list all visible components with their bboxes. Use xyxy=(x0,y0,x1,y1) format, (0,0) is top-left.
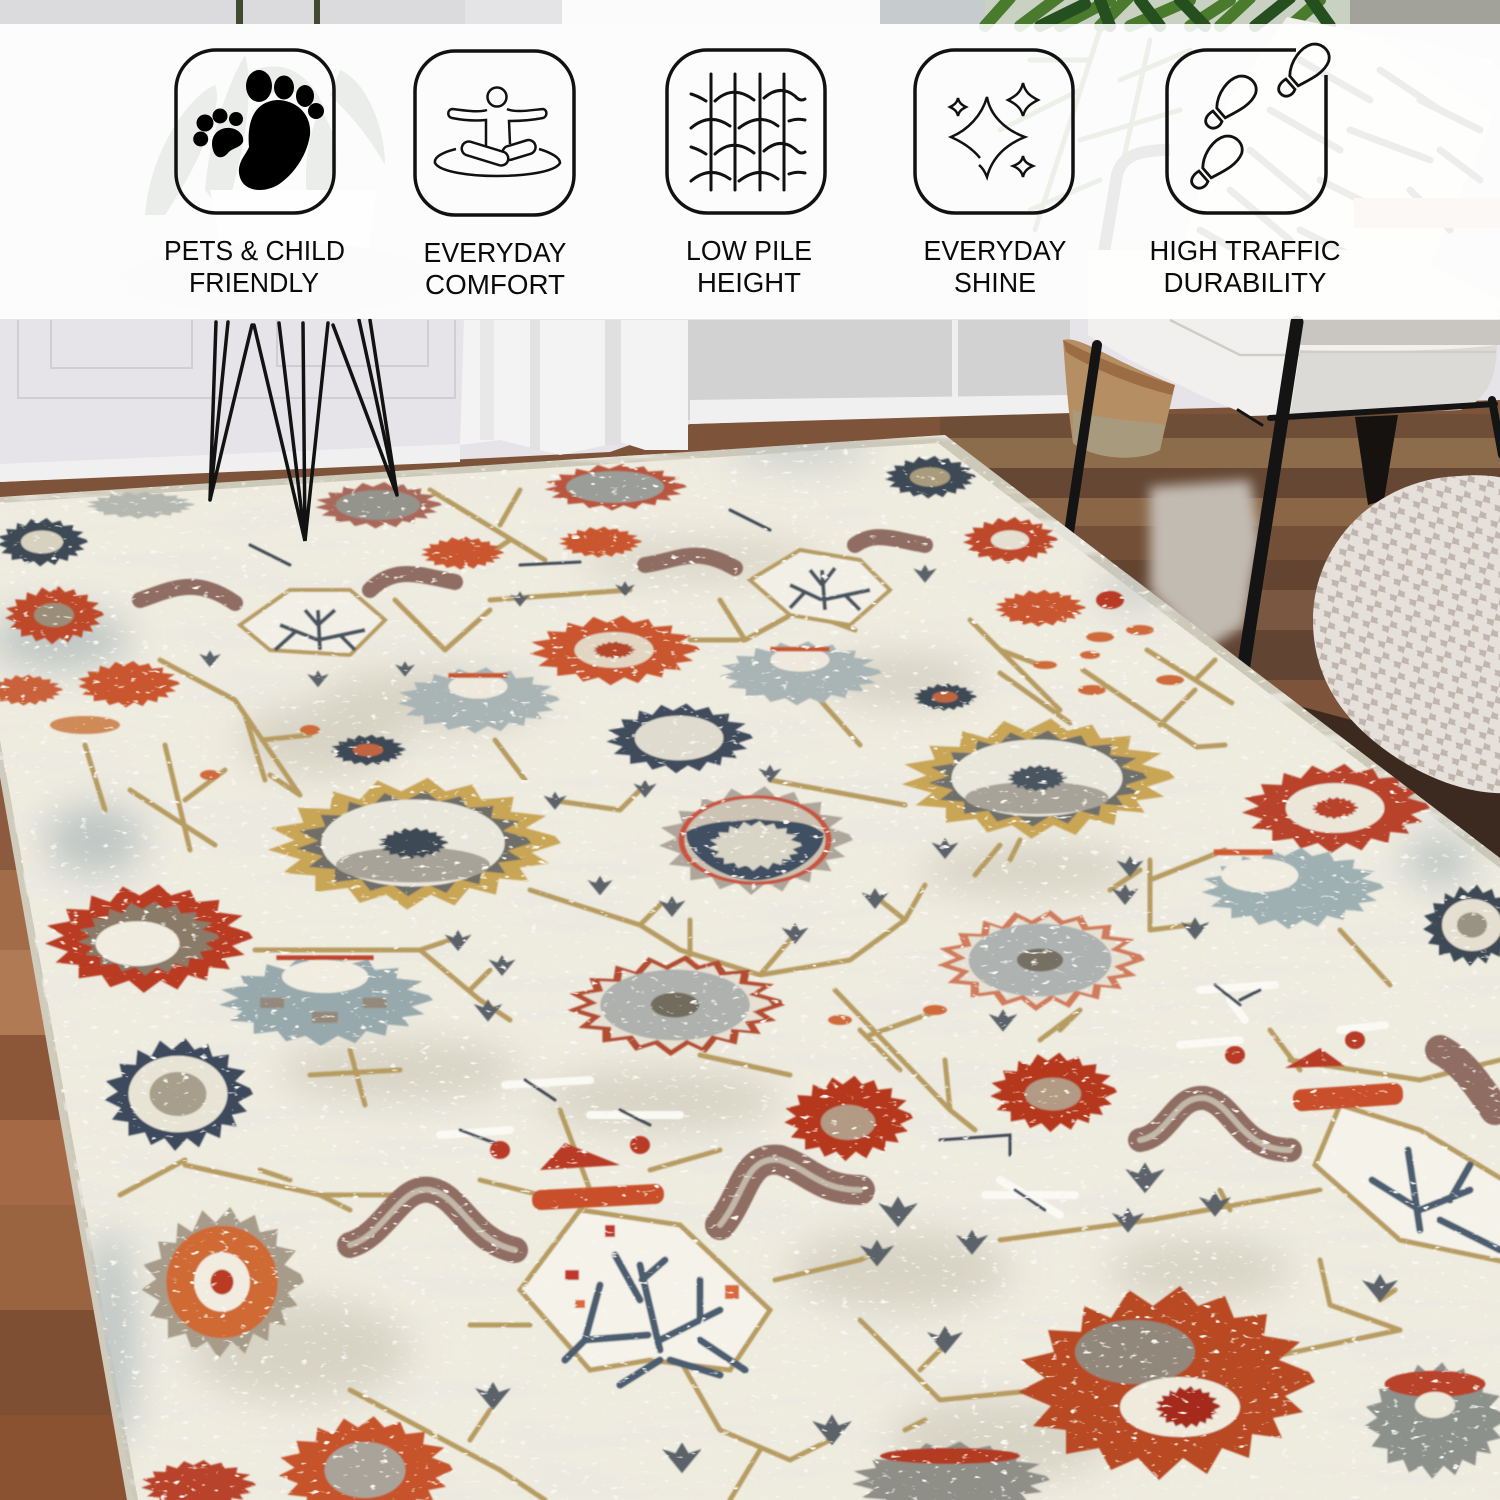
chair back frame behind banner xyxy=(1101,38,1500,270)
plant and side table behind banner xyxy=(125,55,433,316)
label: everyday comfort xyxy=(424,237,567,300)
rug mottled shading xyxy=(190,542,1290,1480)
label: low pile height xyxy=(686,235,812,298)
medallion: navy small right xyxy=(914,684,977,711)
bamboo foliage top right xyxy=(985,0,1330,230)
medallion: rust left xyxy=(45,884,253,993)
medallion: orange left edge xyxy=(0,675,63,706)
medallion: orange upper xyxy=(530,615,700,685)
rug streak texture xyxy=(0,430,1500,1500)
medallion: blue grey upper left xyxy=(398,667,560,733)
medallion: gold left xyxy=(268,778,561,910)
medallion: navy centre xyxy=(659,786,853,895)
rug border wear xyxy=(0,438,1475,1450)
label: high traffic durability xyxy=(1150,235,1340,298)
plant stems above banner xyxy=(236,0,320,24)
medallion: orange left small xyxy=(77,661,180,708)
label: high traffic durability: HIGH TRAFFIC xyxy=(1150,235,1340,266)
wavy brown leaves xyxy=(140,537,1495,1250)
medallion: grey red bottom xyxy=(852,1442,1050,1500)
label: pets and child xyxy=(164,235,345,298)
label: low pile height: LOW PILE xyxy=(686,235,812,266)
medallion: navy far right xyxy=(1423,885,1500,966)
medallion: rust far left xyxy=(5,586,104,644)
leaf tips xyxy=(199,565,1398,1473)
medallion: rust right xyxy=(1242,764,1430,853)
label: high traffic durability: DURABILITY xyxy=(1164,267,1327,298)
medallion: shield left bottom xyxy=(142,1207,304,1358)
rug edge binding xyxy=(0,760,130,1500)
label: pets and child: PETS & CHILD xyxy=(164,235,345,266)
small hex panel with tree, left xyxy=(240,590,385,655)
armchair seat xyxy=(1088,250,1500,416)
feature banner xyxy=(0,24,1500,319)
icon: pets and child xyxy=(176,50,334,213)
room background wall xyxy=(0,0,1500,500)
large hex panel with tree, centre bottom xyxy=(520,1210,770,1385)
stool legs xyxy=(210,320,397,541)
medallion: rust grey centre xyxy=(567,955,785,1056)
label: everyday shine xyxy=(924,235,1067,298)
medallion: salmon grey right xyxy=(937,910,1145,1011)
chair legs xyxy=(1064,322,1500,703)
medallion: navy top left xyxy=(0,518,88,566)
label: low pile height: HEIGHT xyxy=(697,267,801,298)
orange bars xyxy=(532,1082,1404,1210)
icon: everyday shine xyxy=(915,50,1073,213)
icon: low pile height xyxy=(667,50,825,213)
medallion: white left sprig xyxy=(86,492,195,519)
wood floor xyxy=(0,400,1500,1500)
medallion: blue grey upper right xyxy=(720,641,882,705)
label: everyday comfort: EVERYDAY xyxy=(424,237,567,268)
medallion: red lower xyxy=(784,1076,913,1161)
label: pets and child: FRIENDLY xyxy=(189,267,319,298)
medallion: orange bottom xyxy=(279,1416,453,1500)
label: everyday shine: EVERYDAY xyxy=(924,235,1067,266)
medallion: rust top right xyxy=(963,517,1058,564)
red buds xyxy=(490,591,1365,1170)
medallion: navy lower left xyxy=(104,1038,253,1151)
medallion: grey rust top centre xyxy=(544,464,687,511)
terracotta plant pot xyxy=(1063,339,1175,458)
medallion: red lower right xyxy=(990,1053,1117,1132)
small hex panel with tree, right xyxy=(750,550,890,625)
medallion: navy upper xyxy=(606,703,753,773)
label: everyday shine: SHINE xyxy=(954,267,1036,298)
medallion: grey red far right xyxy=(1364,1362,1500,1479)
orange flower clusters xyxy=(50,625,1184,1025)
medallion: large rust bottom right xyxy=(1018,1286,1315,1480)
medallion: blue grey left xyxy=(219,955,433,1046)
medallion: navy top right xyxy=(885,456,976,499)
label: everyday comfort: COMFORT xyxy=(425,269,565,300)
medallion: orange top small xyxy=(421,537,504,570)
baseboard xyxy=(0,395,1070,482)
navy sprig accents xyxy=(250,510,1260,1210)
rug xyxy=(0,430,1500,1500)
icon: everyday comfort xyxy=(415,51,574,215)
medallion: gold right xyxy=(902,718,1175,839)
medallion: orange right small xyxy=(995,590,1086,627)
medallion: orange top small 2 xyxy=(559,527,642,558)
medallion: grey rust top left xyxy=(315,482,442,529)
gold vine branches xyxy=(85,490,1500,1500)
medallion: blue grey right xyxy=(1202,848,1384,929)
medallion: red bottom left xyxy=(141,1460,256,1500)
pile speckle overlay xyxy=(0,430,1500,1500)
zebra pillow behind banner xyxy=(1176,17,1500,323)
icon: high traffic durability xyxy=(1167,37,1335,213)
pouf ottoman xyxy=(1313,475,1500,793)
white floral sprigs xyxy=(440,985,1385,1215)
large hex panel with tree, right xyxy=(1315,1105,1500,1265)
curtain xyxy=(460,320,688,455)
medallion: navy small left xyxy=(331,735,406,766)
